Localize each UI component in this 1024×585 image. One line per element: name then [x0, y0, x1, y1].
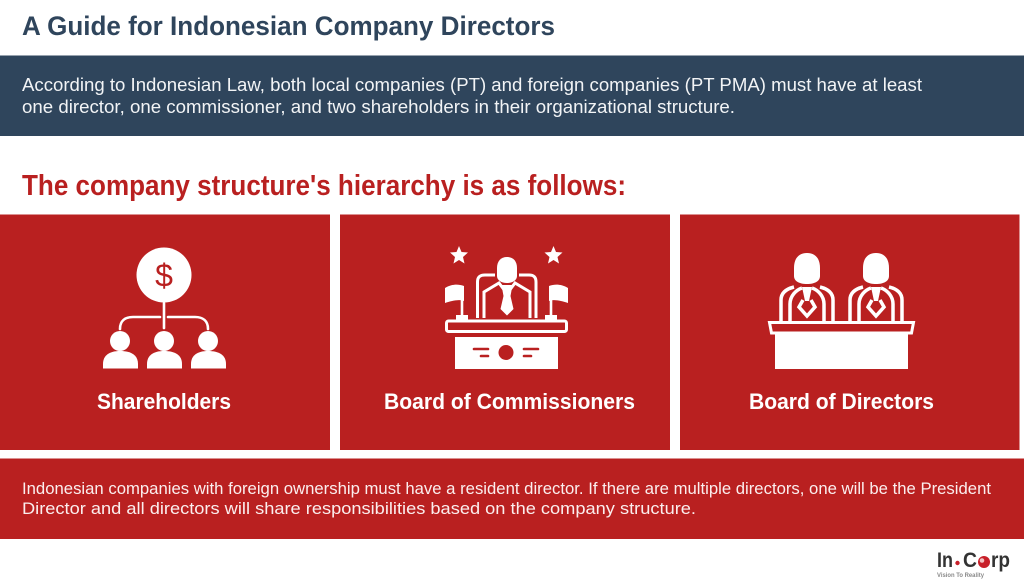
panel: board of directors — [680, 214, 1020, 450]
panel: legal requirement intro: one director, one commissioner, and two shareholders in their organizational structure. — [22, 97, 735, 117]
logo: InCorp: rp — [991, 549, 1010, 572]
panel: resident director note: Director and all directors will share responsibilities based on the company structure. — [22, 499, 696, 518]
logo: InCorp: In — [937, 549, 953, 572]
panel: legal requirement intro — [0, 56, 1024, 136]
panel: legal requirement intro: According to Indonesian Law, both local companies (PT) and foreign companies (PT PMA) must have at least — [22, 75, 922, 95]
logo: InCorp — [937, 549, 1010, 579]
panel: resident director note — [0, 458, 1024, 539]
panel: shareholders — [0, 214, 330, 450]
label: shareholders: Shareholders — [97, 389, 231, 414]
heading: hierarchy: The company structure's hierarchy is as follows: — [22, 170, 626, 202]
logo: InCorp: Vision To Reality — [937, 573, 985, 579]
logo: InCorp: C — [963, 549, 977, 572]
label: board of commissioners: Board of Commissioners — [384, 389, 635, 414]
title: A Guide for Indonesian Company Directors — [22, 11, 555, 41]
label: board of directors: Board of Directors — [749, 389, 934, 414]
icon: shareholders network with dollar — [103, 248, 226, 368]
panel: resident director note: Indonesian companies with foreign ownership must have a resident director. If there are multiple directors, one will be the President — [22, 479, 991, 498]
icon: shareholders network with dollar: $ — [155, 258, 173, 294]
icon: commissioner at podium — [445, 246, 568, 369]
icon: two directors at desk — [770, 253, 914, 369]
panel: board of commissioners — [340, 214, 670, 450]
